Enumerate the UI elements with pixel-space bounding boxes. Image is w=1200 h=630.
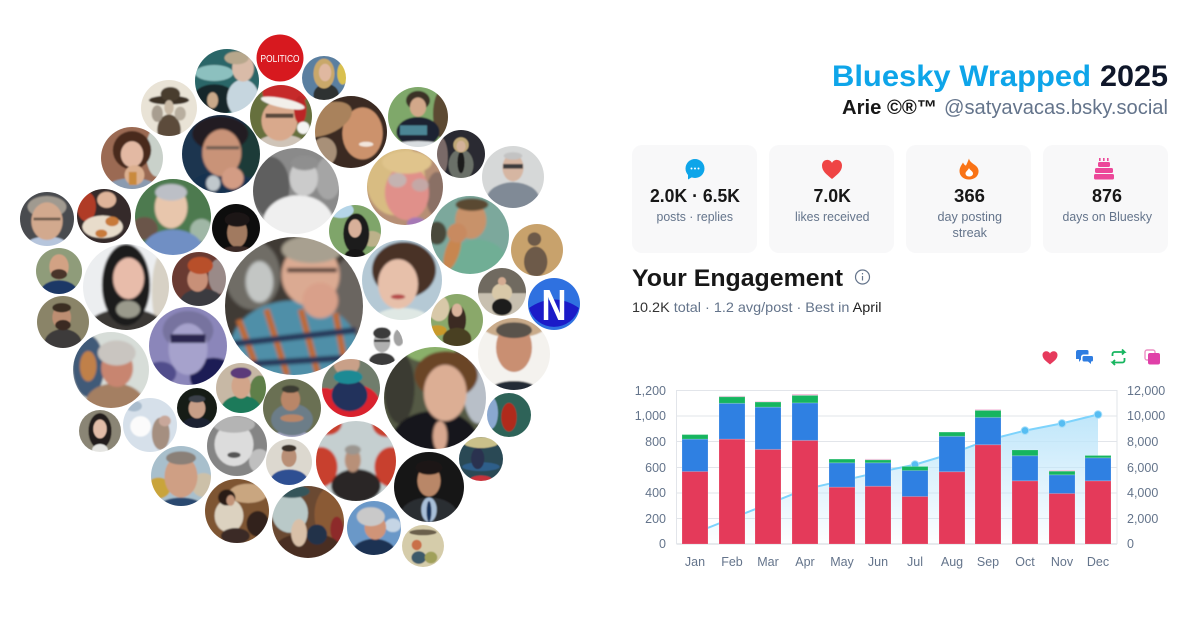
icon: replies legend <box>1076 350 1093 364</box>
user name and handle <box>842 97 1168 119</box>
avatar: N logo <box>528 278 580 330</box>
bar: Jan <box>682 435 708 544</box>
avatar: grey-haired man with glasses <box>482 146 544 208</box>
icon: flame <box>960 158 979 180</box>
avatar: shadow on wall <box>511 224 563 276</box>
avatar: snowman and child <box>123 398 177 452</box>
bar: Feb <box>719 396 745 544</box>
month labels: Dec <box>1087 555 1109 569</box>
avatar: blonde woman with glasses <box>367 149 443 225</box>
icon: chat bubble <box>686 159 704 180</box>
month labels: May <box>830 555 855 569</box>
avatar: woman reading book <box>388 87 448 147</box>
left axis labels <box>635 384 666 551</box>
avatar: woman with long hair indoors <box>423 286 491 354</box>
stat value: 7.0K <box>814 186 851 206</box>
avatar: smiling older man <box>135 179 211 255</box>
bar: Apr <box>792 394 818 544</box>
avatar: curly-haired man with glasses <box>182 115 260 193</box>
avatar: man in blue t-shirt <box>266 439 312 485</box>
panel: posts and replies <box>632 145 757 253</box>
month labels: Jan <box>685 555 705 569</box>
avatar: man in sunglasses <box>263 379 321 437</box>
right axis labels <box>1127 384 1165 551</box>
left axis labels: 800 <box>645 435 666 449</box>
right axis labels: 12,000 <box>1127 384 1165 398</box>
month labels: Oct <box>1015 555 1035 569</box>
month labels: Mar <box>757 555 779 569</box>
left axis labels: 1,000 <box>635 409 666 423</box>
avatar: older man at sunset <box>151 446 211 506</box>
stacked bars <box>682 394 1111 544</box>
title: 2025 <box>1100 60 1168 93</box>
month labels <box>685 555 1109 569</box>
left axis labels: 1,200 <box>635 384 666 398</box>
avatar: bald bearded man <box>36 248 82 294</box>
icon: heart <box>822 160 842 179</box>
avatar: curly-haired woman <box>362 240 442 320</box>
stat label second line: streak <box>952 226 988 240</box>
left axis labels: 0 <box>659 537 666 551</box>
month labels: Feb <box>721 555 743 569</box>
stat value: 876 <box>1092 186 1122 206</box>
avatar: woman in cosy interior <box>272 486 344 558</box>
month labels: Sep <box>977 555 999 569</box>
stat label: day posting <box>938 210 1002 224</box>
left axis labels: 200 <box>645 512 666 526</box>
avatar: greyscale smiling woman <box>207 416 267 476</box>
avatar: older man glasses <box>20 192 74 246</box>
avatar: man seated on steps <box>478 268 526 316</box>
avatar: Politico logo: POLITICO <box>260 53 300 65</box>
avatar: Politico logo <box>256 34 304 82</box>
bar: Aug <box>939 432 965 544</box>
avatar: man in dark cap <box>177 388 217 428</box>
month labels: Nov <box>1051 555 1074 569</box>
avatar: man in Santa hat <box>250 85 312 147</box>
avatar: man in purple cap <box>216 363 266 413</box>
avatar: woman with phone <box>437 130 485 178</box>
avatar: red-haired man <box>172 252 226 306</box>
user name and handle: Arie ©®™ <box>842 97 937 119</box>
bar: Oct <box>1012 450 1038 544</box>
right axis labels: 4,000 <box>1127 486 1158 500</box>
right axis labels: 2,000 <box>1127 512 1158 526</box>
panel: avatar bubble cluster <box>12 34 580 573</box>
avatar: woman in park <box>329 205 381 257</box>
stat label: likes received <box>795 210 870 224</box>
avatar: Wonderland illustration <box>396 519 450 573</box>
avatar: blond woman <box>302 56 346 100</box>
avatar: man in hat with cat <box>195 49 259 113</box>
avatar: brunette woman large portrait <box>369 332 501 472</box>
heading: Your Engagement: Your Engagement <box>632 265 843 292</box>
right axis labels: 6,000 <box>1127 461 1158 475</box>
avatar: monochrome person with glasses <box>368 326 403 365</box>
avatar: person with cat <box>77 189 131 243</box>
avatar: purple duotone person <box>149 307 227 385</box>
avatar: Spock <box>212 204 260 252</box>
avatar: grey-haired man against sky <box>339 493 409 566</box>
avatar: young dark-haired woman <box>79 410 121 452</box>
icon: birthday cake <box>1094 158 1114 180</box>
avatar: black and white man <box>253 148 339 234</box>
avatar: central large man in plaid shirt <box>225 237 363 375</box>
left axis labels: 400 <box>645 486 666 500</box>
right axis labels: 8,000 <box>1127 435 1158 449</box>
chart: monthly engagement <box>635 384 1165 569</box>
avatar: festive tree building <box>480 386 538 444</box>
month labels: Aug <box>941 555 963 569</box>
left axis labels: 600 <box>645 461 666 475</box>
stat value: 366 <box>954 186 985 206</box>
avatar: man in sunglasses before red shapes <box>304 409 408 513</box>
icon: quotes legend <box>1145 350 1160 364</box>
icon: info <box>856 270 870 284</box>
engagement summary: 10.2K total · 1.2 avg/post · Best in April <box>632 299 882 315</box>
bar: Mar <box>755 401 781 544</box>
right axis labels: 10,000 <box>1127 409 1165 423</box>
avatar: older man portrait <box>467 307 561 401</box>
bar: May <box>829 459 855 544</box>
icon: reposts legend <box>1112 350 1124 365</box>
user name and handle: @satyavacas.bsky.social <box>944 97 1168 119</box>
grid lines <box>676 390 1117 544</box>
avatar: person in red jacket <box>313 350 389 426</box>
bar: Jun <box>865 459 891 544</box>
stat label: days on Bluesky <box>1062 210 1153 224</box>
avatar: woman in straw hat <box>315 96 387 168</box>
bar: Nov <box>1049 470 1075 544</box>
panel: days on Bluesky <box>1043 145 1168 253</box>
title: Bluesky Wrapped <box>832 60 1091 93</box>
panel: day posting streak <box>906 145 1031 253</box>
avatar: person by waterfront <box>452 430 510 488</box>
month labels: Jul <box>907 555 923 569</box>
bar: Jul <box>902 466 928 544</box>
chart legend icons <box>1042 350 1160 365</box>
avatar: man in dark suit <box>384 442 474 534</box>
panel: likes received <box>769 145 894 253</box>
avatar: woman drinking <box>101 127 163 189</box>
stat label: posts · replies <box>656 210 733 224</box>
avatar: vintage hat lady <box>141 80 197 136</box>
avatar: dark-haired woman <box>83 244 169 330</box>
month labels: Apr <box>795 555 815 569</box>
bar: Sep <box>975 409 1001 544</box>
avatar: N logo: N <box>542 281 566 330</box>
bar: Dec <box>1085 456 1111 544</box>
stat value: 2.0K · 6.5K <box>650 186 740 206</box>
avatar: older woman with painting <box>73 332 149 408</box>
right axis labels: 0 <box>1127 537 1134 551</box>
cumulative area and line <box>695 411 1102 544</box>
month labels: Jun <box>868 555 888 569</box>
avatar: bearded man with glasses <box>37 296 89 348</box>
avatar: man in teal shirt <box>431 196 509 274</box>
avatar: seated woman in cabin <box>205 479 269 543</box>
icon: heart legend <box>1042 351 1058 364</box>
